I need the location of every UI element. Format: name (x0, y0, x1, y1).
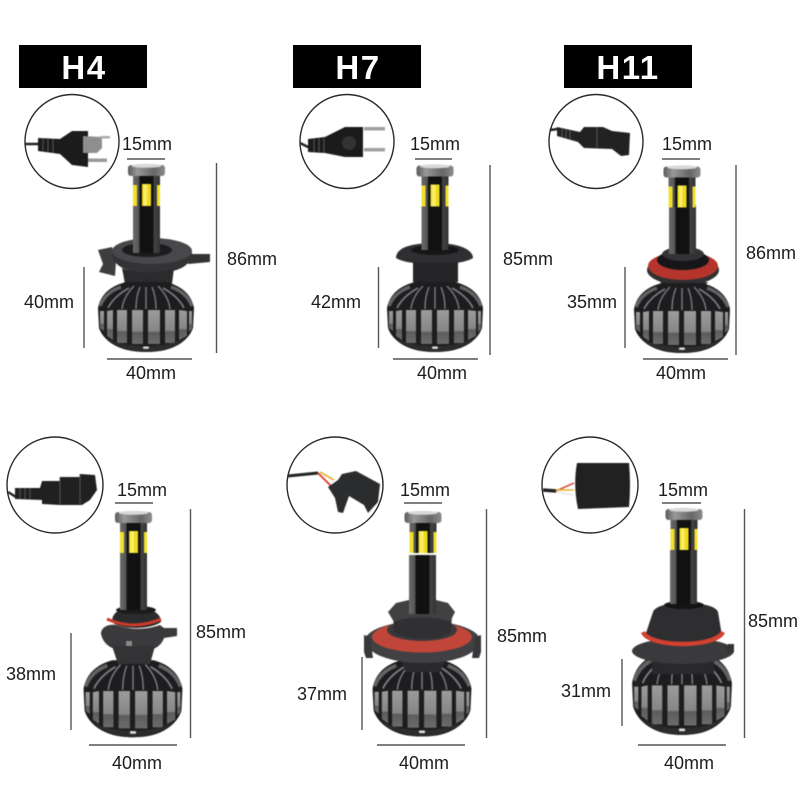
bulb illustration (84, 511, 182, 737)
dimension: 40mm width (107, 359, 192, 383)
dimension: 85mm: 85mm (748, 611, 798, 631)
dimension: 38mm height (6, 633, 71, 730)
dimension: 86mm: 86mm (746, 243, 796, 263)
panel: H13 style bulb, bottom center (287, 437, 547, 773)
dimension: 15mm: 15mm (658, 480, 708, 500)
dimension: 85mm: 85mm (196, 622, 246, 642)
dimension: 31mm height (561, 659, 622, 726)
bulb illustration H7 (387, 164, 483, 352)
dimension: 31mm height: 31mm (561, 681, 611, 701)
panel: H4 bulb (19, 45, 277, 383)
dimension: 37mm height (297, 657, 362, 730)
dimension: 86mm: 86mm (227, 249, 277, 269)
heading: H7: H7 (335, 49, 381, 86)
dimension: 15mm: 15mm (410, 134, 460, 154)
bulb illustration H4 (98, 164, 210, 352)
panel: H7 bulb (293, 45, 553, 383)
dimension: 85mm: 85mm (503, 249, 553, 269)
bulb illustration (364, 511, 481, 736)
dimension: 15mm: 15mm (400, 480, 450, 500)
dimension: 85mm: 85mm (497, 626, 547, 646)
heading: H4 (19, 45, 147, 88)
dimension: 40mm width: 40mm (656, 363, 706, 383)
panel: 9007 style bulb, bottom right (542, 437, 798, 773)
icon: H11 connector inset (549, 94, 643, 188)
bulb illustration (632, 508, 734, 735)
dimension: 38mm height: 38mm (6, 664, 56, 684)
dimension: 40mm width: 40mm (126, 363, 176, 383)
dimension: 42mm height (311, 267, 378, 348)
dimension: 40mm width (377, 745, 465, 773)
heading: H7 (293, 45, 421, 88)
heading: H4: H4 (61, 49, 107, 86)
heading: H11: H11 (596, 49, 660, 86)
dimension: 40mm width: 40mm (417, 363, 467, 383)
dimension: 37mm height: 37mm (297, 684, 347, 704)
dimension: 40mm width (643, 359, 728, 383)
dimension: 40mm width: 40mm (399, 753, 449, 773)
dimension: 42mm height: 42mm (311, 292, 361, 312)
panel: H11 bulb (549, 45, 796, 383)
dimension: 40mm width: 40mm (664, 753, 714, 773)
icon: connector inset (7, 437, 103, 533)
panel: 9005 style bulb, bottom left (6, 437, 246, 773)
heading: H11 (564, 45, 692, 88)
dimension: 15mm: 15mm (662, 134, 712, 154)
dimension: 40mm width: 40mm (112, 753, 162, 773)
dimension: 15mm: 15mm (117, 480, 167, 500)
dimension: 40mm height: 40mm (24, 292, 74, 312)
icon: H7 connector inset (300, 94, 394, 188)
dimension: 35mm height: 35mm (567, 292, 617, 312)
dimension: 40mm height (24, 267, 84, 348)
dimension: 40mm width (89, 745, 177, 773)
icon: H4 connector inset (25, 94, 119, 188)
bulb illustration H11 (634, 165, 730, 353)
dimension: 15mm: 15mm (122, 134, 172, 154)
icon: connector inset (542, 437, 638, 533)
dimension: 35mm height (567, 267, 625, 348)
icon: connector inset (287, 437, 383, 533)
dimension: 40mm width (638, 745, 726, 773)
dimension: 40mm width (393, 359, 478, 383)
